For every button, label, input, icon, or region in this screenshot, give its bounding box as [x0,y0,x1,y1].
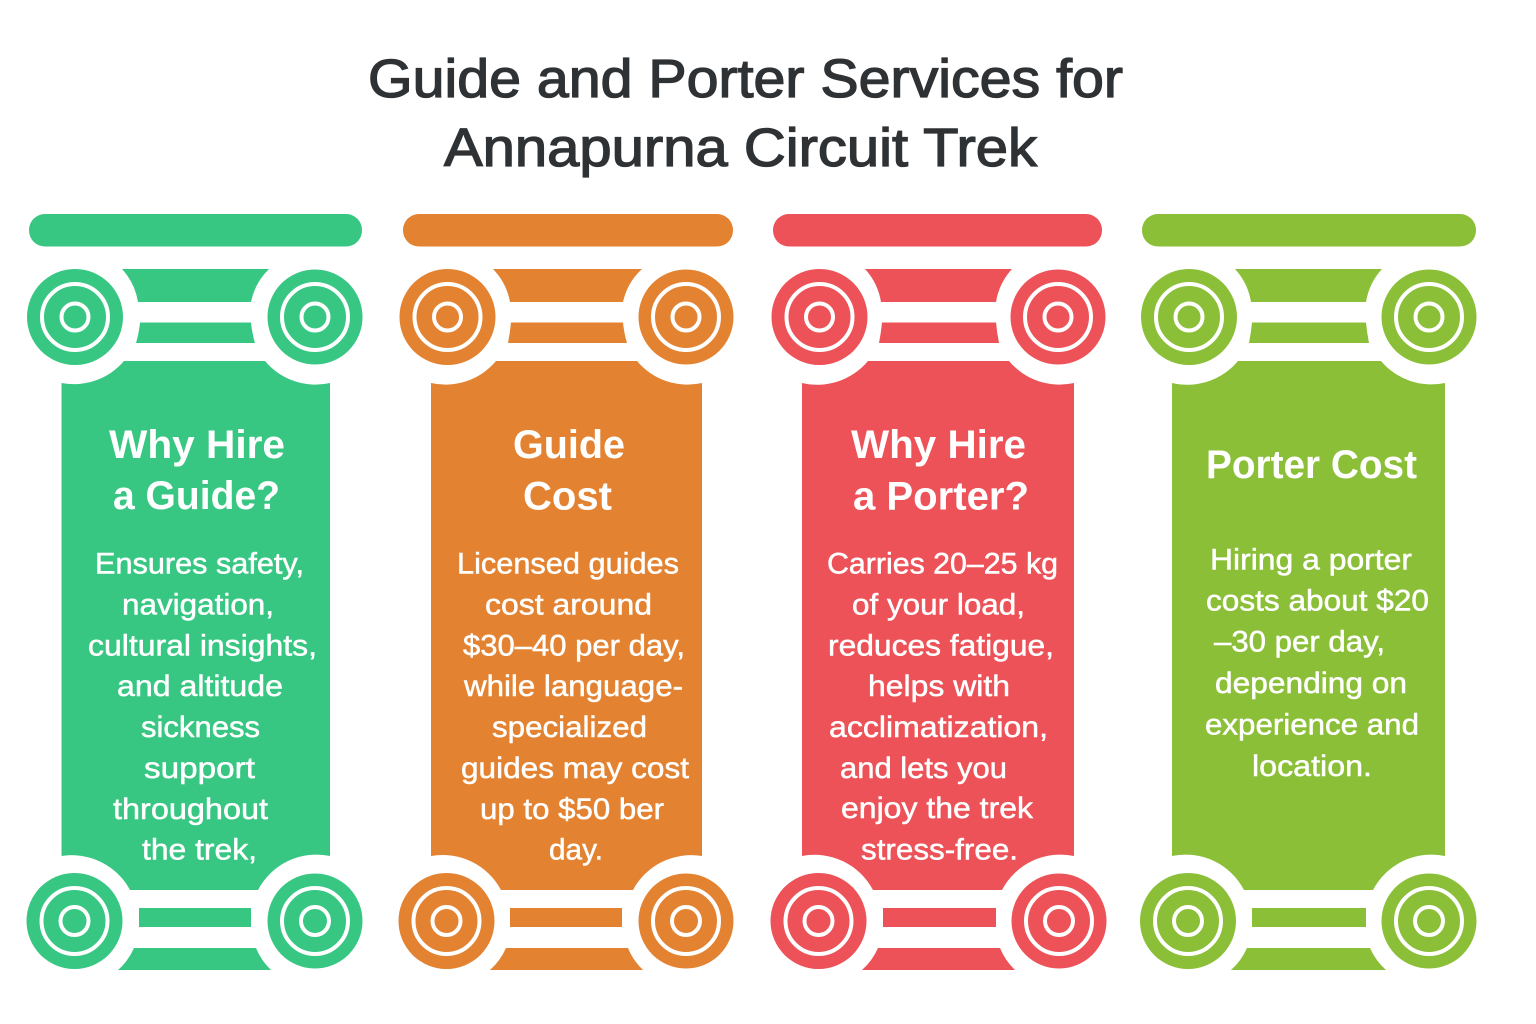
pillar capital: lime [1141,214,1476,365]
heading: why hire a porter [851,423,1029,518]
text: porter benefits: and lets you [840,752,1007,785]
title: Annapurna Circuit Trek [444,118,1038,178]
heading: why hire a guide [109,423,285,518]
text: porter benefits: stress-free. [861,834,1018,866]
text: porter cost details: experience and [1205,708,1419,742]
text: porter cost details: costs about $20 [1206,584,1429,618]
text: guide benefits: throughout [113,793,269,826]
text: porter benefits: reduces fatigue, [828,630,1054,662]
pillar base: red [770,873,1106,970]
panel: porter cost [1140,214,1476,970]
text: guide cost details: cost around [485,588,652,622]
text: guide cost details: up to $50 ber [480,793,664,826]
text: porter benefits: helps with [868,670,1010,703]
pillar capital: green [27,214,362,365]
text: porter benefits [827,548,1058,866]
pillar capital: orange [400,214,734,365]
text: porter benefits: Carries 20–25 kg [827,548,1058,580]
text: guide benefits: Ensures safety, [95,548,304,580]
pillar shaft: lime [1172,361,1445,890]
heading: guide cost: Guide [513,423,625,467]
text: guide benefits: sickness [141,711,260,744]
text: porter benefits: enjoy the trek [841,792,1034,825]
heading: why hire a guide: a Guide? [113,474,280,518]
text: guide cost details: specialized [492,711,647,744]
text: porter cost details: depending on [1215,667,1407,700]
heading: why hire a guide: Why Hire [109,423,285,467]
text: guide benefits: navigation, [122,588,274,622]
heading: guide cost [513,423,625,518]
text: porter benefits: of your load, [852,588,1025,622]
text: guide benefits: cultural insights, [88,630,317,662]
panel: guide cost [398,214,734,970]
heading: porter cost: Porter Cost [1206,443,1417,487]
text: guide cost details: while language- [463,670,683,703]
text: porter cost details: Hiring a porter [1210,544,1412,576]
text: guide cost details: $30–40 per day, [463,630,685,662]
panel: why hire a guide [26,214,362,970]
heading: guide cost: Cost [523,474,612,518]
pillar shaft: red [802,361,1074,890]
text: guide benefits: the trek, [142,834,257,866]
pillar base: green [26,873,362,970]
pillar base: orange [398,873,734,970]
title: Guide and Porter Services for [368,49,1123,109]
text: guide cost details: guides may cost [461,752,690,785]
pillar shaft: green [62,361,330,890]
text: guide benefits [88,548,317,866]
text: guide benefits: support [144,752,256,785]
text: porter benefits: acclimatization, [829,711,1048,744]
text: guide cost details [457,548,690,866]
pillar base: lime [1140,873,1476,970]
panel: why hire a porter [770,214,1106,970]
text: guide cost details: Licensed guides [457,548,679,580]
text: porter cost details: –30 per day, [1214,626,1385,658]
title [368,49,1123,178]
text: porter cost details: location. [1252,750,1372,783]
pillar shaft: orange [431,361,702,890]
pillar capital: red [772,214,1106,365]
text: guide benefits: and altitude [117,670,283,703]
heading: why hire a porter: Why Hire [851,423,1026,467]
text: porter cost details [1205,544,1429,783]
text: guide cost details: day. [549,834,603,866]
heading: why hire a porter: a Porter? [853,474,1029,518]
